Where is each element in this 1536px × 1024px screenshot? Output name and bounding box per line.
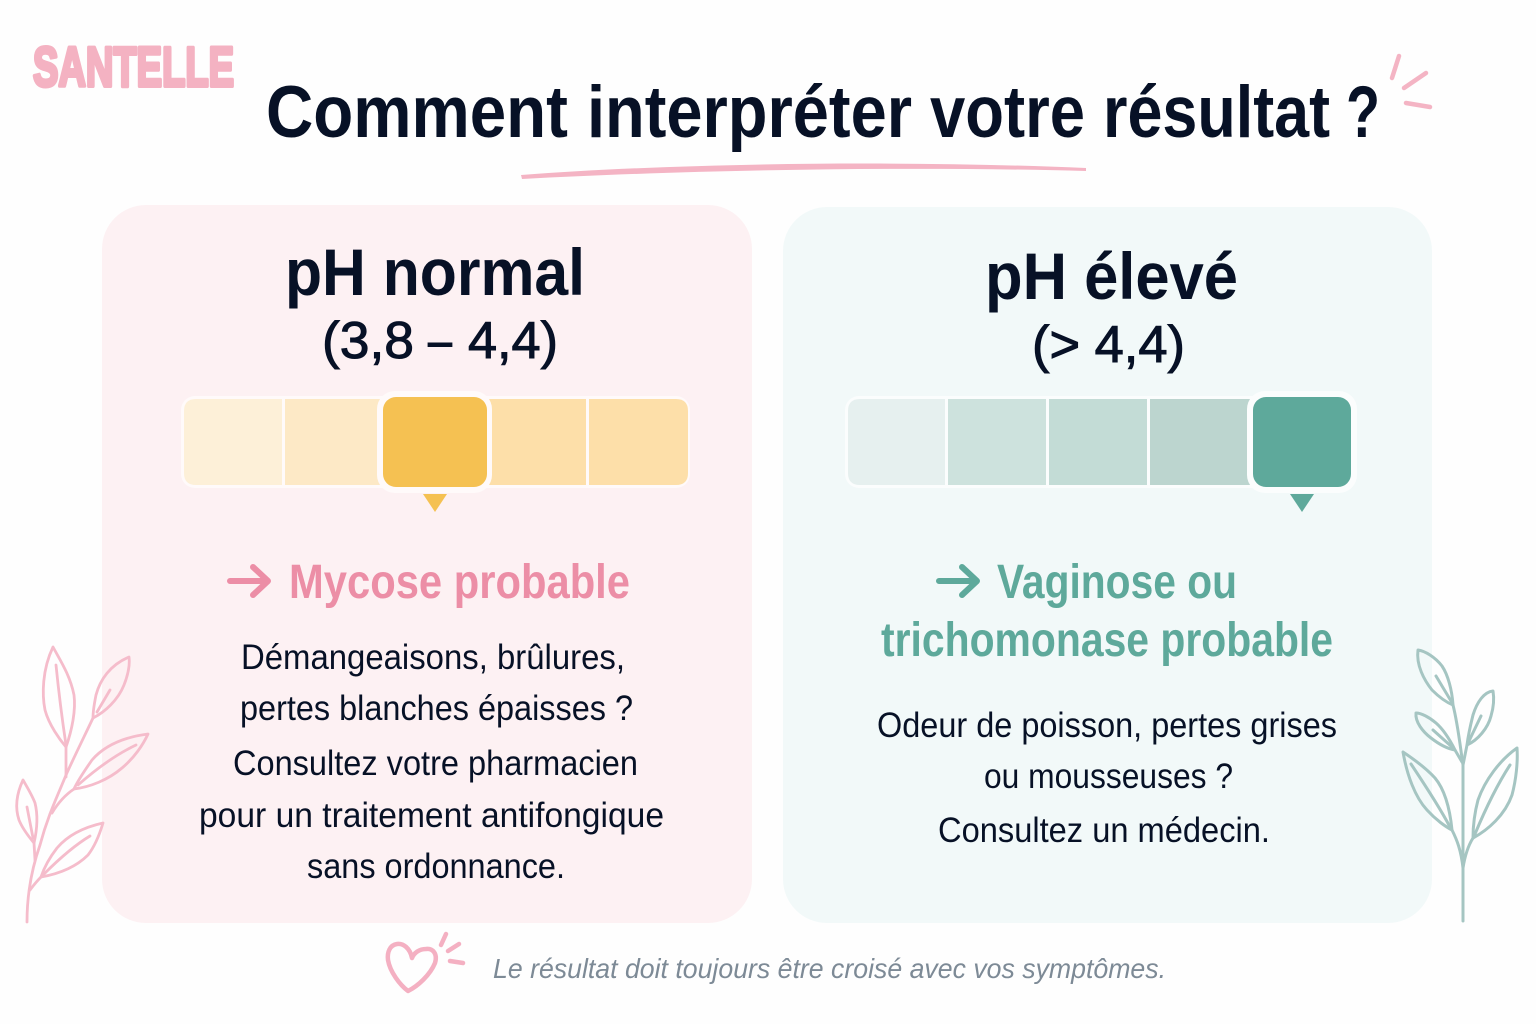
title: résultat bbox=[1103, 72, 1330, 153]
arrow: green bbox=[939, 567, 977, 595]
range: 3,8 to 4,4 bbox=[322, 312, 558, 370]
heading: pH normal: pH normal bbox=[285, 235, 585, 309]
result: Vaginose ou trichomonase probable: Vaginose ou bbox=[997, 556, 1237, 609]
range: 3,8 to 4,4: (3,8 bbox=[322, 312, 414, 370]
panel: pH élevé bbox=[783, 207, 1432, 923]
result: Vaginose ou trichomonase probable: trichomonase probable bbox=[881, 614, 1333, 667]
body text: pH élevé advice: Odeur de poisson, pertes grises bbox=[877, 706, 1337, 745]
arrow: pink bbox=[230, 567, 268, 595]
body text: pH élevé advice bbox=[877, 706, 1337, 850]
body text: pH normal advice: sans ordonnance. bbox=[307, 847, 565, 886]
logo: Santelle: SANTELLE bbox=[33, 35, 234, 98]
body text: pH normal advice bbox=[199, 638, 664, 886]
icon: heart bbox=[388, 934, 463, 991]
title: interpréter bbox=[587, 72, 912, 153]
range: above 4,4: (> 4,4) bbox=[1032, 316, 1185, 374]
body text: pH normal advice: pour un traitement antifongique bbox=[199, 796, 664, 835]
body text: pH normal advice: Consultez votre pharmacien bbox=[233, 744, 638, 783]
illustration: pink branch bbox=[17, 647, 148, 922]
marker: yellow pointer bbox=[423, 494, 447, 512]
body text: pH normal advice: Démangeaisons, brûlures, bbox=[241, 638, 625, 677]
body text: pH élevé advice: Consultez un médecin. bbox=[938, 811, 1270, 850]
result: Mycose probable: Mycose probable bbox=[289, 556, 630, 609]
range: 3,8 to 4,4: – bbox=[428, 312, 452, 370]
title: Comment bbox=[266, 72, 568, 153]
marker: green pointer bbox=[1290, 494, 1314, 512]
panel: pH normal bbox=[102, 205, 752, 923]
range: 3,8 to 4,4: 4,4) bbox=[468, 312, 558, 370]
title underline bbox=[521, 164, 1086, 179]
icon: title sparkles bbox=[1392, 56, 1430, 107]
result: Vaginose ou trichomonase probable bbox=[881, 556, 1333, 667]
body text: pH élevé advice: ou mousseuses ? bbox=[984, 757, 1233, 796]
title bbox=[266, 72, 1380, 153]
title: ? bbox=[1346, 72, 1380, 153]
pH scale: green bbox=[845, 391, 1357, 512]
footer note: Le résultat doit toujours être croisé avec vos symptômes. bbox=[493, 953, 1166, 984]
pH scale: yellow bbox=[181, 391, 690, 512]
title: votre bbox=[930, 72, 1085, 153]
heading: pH élevé: pH élevé bbox=[985, 239, 1238, 313]
illustration: green branch bbox=[1403, 650, 1517, 921]
body text: pH normal advice: pertes blanches épaisses ? bbox=[240, 689, 633, 728]
